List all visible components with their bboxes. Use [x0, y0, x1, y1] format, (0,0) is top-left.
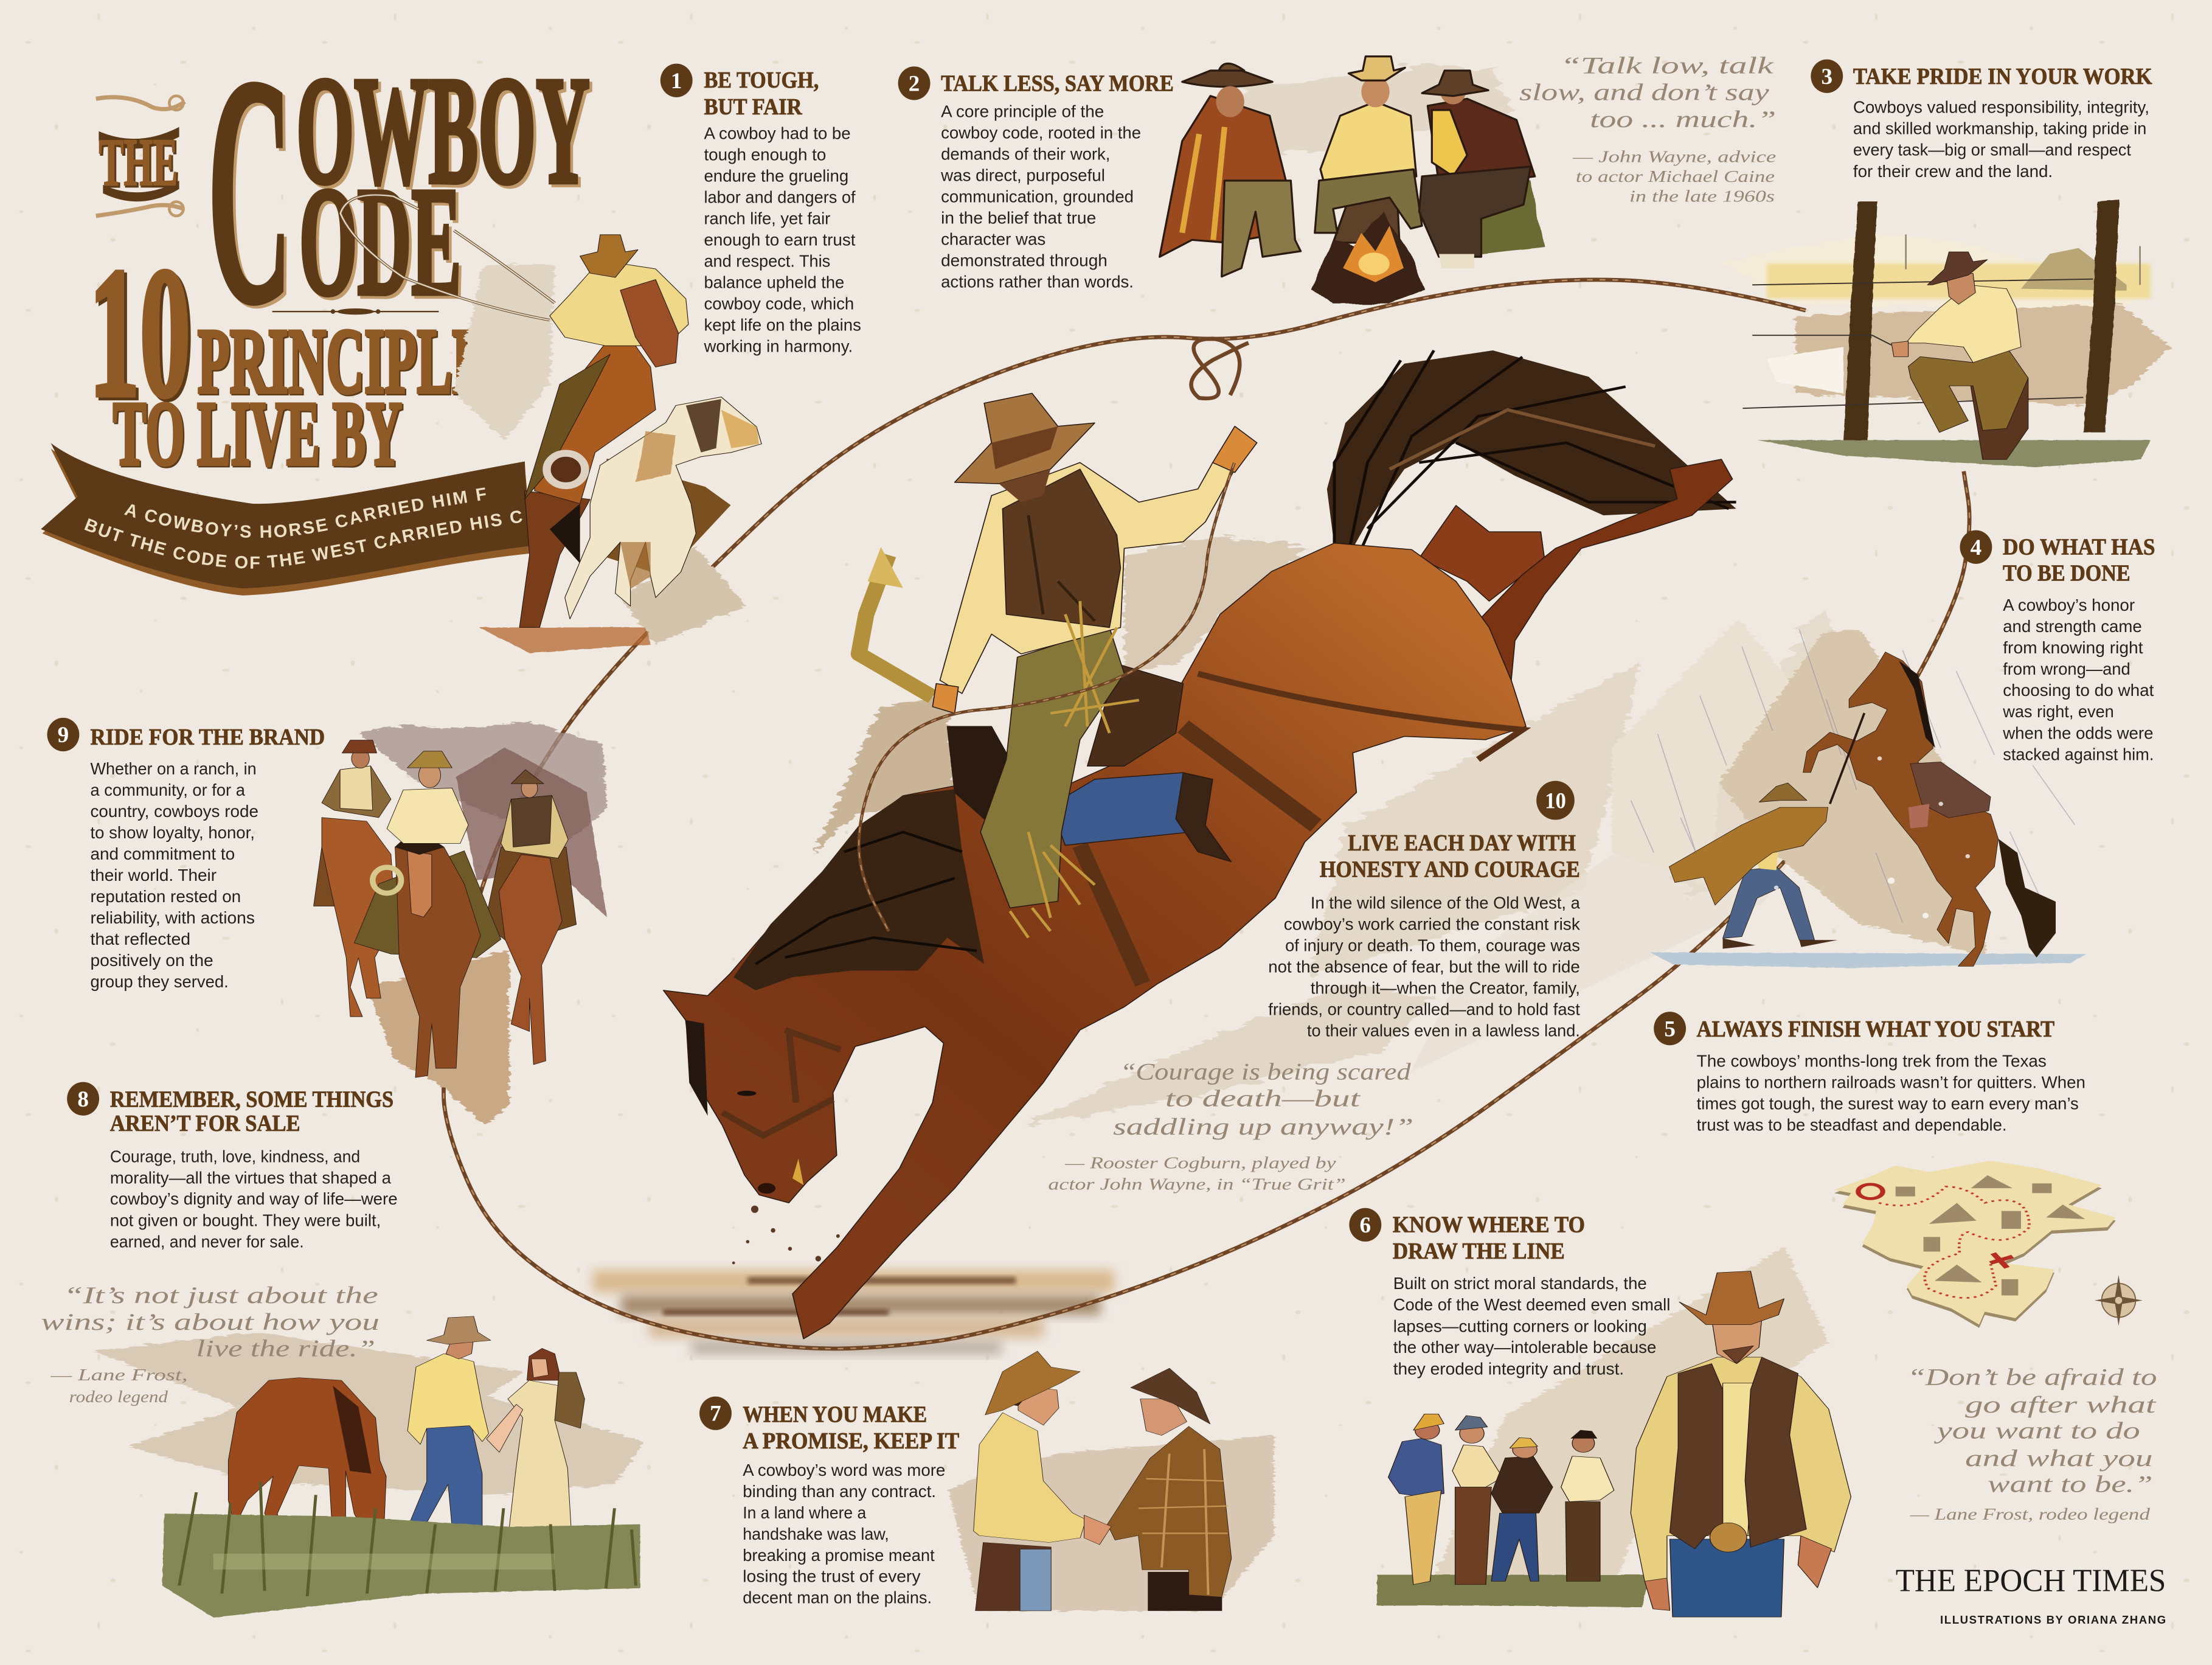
word: THE with ornaments: THE: [99, 125, 178, 200]
principle 5: ALWAYS FINISH WHAT YOU START: [1697, 1017, 2054, 1042]
principle 2: was direct, purposeful: [940, 166, 1105, 185]
principle 2: communication, grounded: [941, 187, 1134, 206]
principle 7: In a land where a: [743, 1503, 867, 1522]
principle 8: AREN’T FOR SALE: [110, 1111, 300, 1136]
subtitle: 10 principles to live by: PRINCIPLES: [199, 311, 518, 414]
principle 7: A cowboy’s word was more: [743, 1461, 945, 1479]
principle 9: country, cowboys rode: [90, 802, 258, 821]
principle 1: and respect. This: [704, 252, 830, 271]
illustration: cowboy family and grazing horse: [94, 1316, 645, 1618]
horse mane: [685, 789, 984, 1116]
principle 2: demonstrated through: [941, 251, 1108, 270]
illustration: cowboy roping a calf: [341, 195, 761, 653]
vest: [1002, 469, 1120, 628]
banner ribbon tail: [606, 459, 731, 590]
word: COWBOY: C: [207, 9, 292, 372]
quote: John Wayne: too ... much.”: [1590, 106, 1776, 133]
principle 6: they eroded integrity and trust.: [1393, 1359, 1624, 1378]
quote: Lane Frost, advice: — Lane Frost, rodeo legend: [1909, 1505, 2150, 1524]
principle 6: the other way—intolerable because: [1393, 1338, 1656, 1357]
background watercolor washes: [814, 63, 1876, 1125]
principle 2: character was: [941, 230, 1045, 249]
principle 2: 2: [909, 72, 920, 97]
principle 1: BUT FAIR: [704, 94, 802, 120]
principle 3: [1811, 60, 2152, 181]
quote: John Wayne: “Talk low, talk: [1560, 52, 1775, 79]
principle 4: stacked against him.: [2003, 745, 2154, 763]
principle 4: from wrong—and: [2003, 659, 2131, 678]
principle 2: A core principle of the: [941, 102, 1104, 121]
principle 6: lapses—cutting corners or looking: [1393, 1316, 1647, 1335]
principle 10: to their values even in a lawless land.: [1307, 1021, 1580, 1040]
principle 10: cowboy’s work carried the constant risk: [1284, 915, 1580, 934]
ground splash under the horse: [592, 1206, 1114, 1355]
word: CODE: [299, 156, 464, 330]
quote: Lane Frost, advice: go after what: [1965, 1391, 2157, 1418]
principle 9: reputation rested on: [90, 887, 241, 906]
principle 9: to show loyalty, honor,: [90, 823, 255, 842]
main cowboy in leather vest: [1631, 1271, 1851, 1617]
grazing horse: [228, 1378, 386, 1540]
horse tail: [1327, 350, 1736, 575]
principle 8: cowboy’s dignity and way of life—were: [110, 1189, 398, 1208]
principle 10: In the wild silence of the Old West, a: [1311, 894, 1580, 912]
principle 9: reliability, with actions: [90, 908, 255, 927]
subtitle: 10 principles to live by: TO LIVE BY: [113, 383, 402, 484]
man in yellow shirt: [399, 1316, 491, 1554]
principle 5: 5: [1664, 1017, 1676, 1041]
principle 1: working in harmony.: [703, 337, 853, 356]
saddle: [948, 726, 1010, 819]
quote: John Wayne: slow, and don’t say: [1519, 79, 1769, 106]
principle 6: Built on strict moral standards, the: [1393, 1274, 1647, 1293]
principle 9: RIDE FOR THE BRAND: [90, 725, 325, 750]
principle 2: TALK LESS, SAY MORE: [941, 71, 1174, 96]
principle 8: 8: [77, 1087, 89, 1112]
jeans and boot: [1050, 773, 1191, 845]
principle 6: KNOW WHERE TO: [1393, 1212, 1585, 1237]
principle 1: ranch life, yet fair: [704, 209, 830, 228]
principle 4: when the odds were: [2002, 723, 2153, 742]
illustration: three riders on horseback: [314, 721, 607, 1125]
lasso rope: [443, 280, 1969, 1349]
principle 1: endure the grueling: [704, 167, 848, 186]
right rider and horse: [485, 770, 577, 1065]
left rider and horse: [314, 740, 395, 1017]
principle 6: [1349, 1208, 1670, 1378]
principle 6: Code of the West deemed even small: [1393, 1295, 1670, 1314]
principle 4: DO WHAT HAS: [2003, 534, 2155, 560]
principle 2: demands of their work,: [941, 145, 1110, 164]
principle 7: handshake was law,: [743, 1524, 889, 1543]
quote: Lane Frost, family: — Lane Frost,: [50, 1366, 188, 1385]
campfire: [1312, 212, 1425, 304]
principle 5: The cowboys’ months-long trek from the Texas: [1697, 1052, 2047, 1071]
principle 10: through it—when the Creator, family,: [1311, 979, 1580, 998]
quote: Lane Frost, family: [41, 1282, 380, 1406]
quote: Lane Frost, family: “It’s not just about the: [63, 1282, 378, 1309]
principle 3: Cowboys valued responsibility, integrity,: [1853, 98, 2149, 117]
shirt: [940, 462, 1235, 693]
principle 4: from knowing right: [2003, 638, 2143, 657]
principle 1: balance upheld the: [704, 273, 844, 292]
horse hind legs: [1419, 459, 1733, 680]
principle 4: and strength came: [2003, 617, 2142, 636]
word: THE with ornaments: [96, 96, 185, 216]
man in yellow shirt on a stump: [1315, 57, 1422, 243]
quote: Lane Frost, advice: and what you: [1965, 1445, 2153, 1472]
principle 8: REMEMBER, SOME THINGS: [110, 1087, 394, 1113]
quote: John Wayne: — John Wayne, advice: [1572, 148, 1776, 167]
main illustration: bucking bronco and rider: [664, 350, 1736, 1339]
principle 4: was right, even: [2002, 702, 2114, 721]
icon: compass rose: [2095, 1275, 2143, 1326]
principle 6: 6: [1360, 1213, 1371, 1238]
principle 3: and skilled workmanship, taking pride in: [1853, 119, 2146, 138]
subtitle: 10 principles to live by: [89, 229, 518, 485]
principle 9: positively on the: [90, 951, 213, 970]
principle 5: plains to northern railroads wasn’t for quitters. When: [1697, 1073, 2085, 1092]
rider braided rope end: [859, 555, 932, 697]
principle 2: in the belief that true: [941, 209, 1096, 228]
quote: John Wayne: [1519, 52, 1776, 206]
quote: Lane Frost, family: live the ride.”: [196, 1335, 375, 1361]
principle 6: DRAW THE LINE: [1393, 1239, 1565, 1264]
text: OWBOY: [296, 45, 590, 215]
quote: Rooster Cogburn: saddling up anyway!”: [1113, 1113, 1413, 1140]
subtitle: 10 principles to live by: TO LIVE BY: [114, 384, 403, 485]
quote: Rooster Cogburn: to death—but: [1165, 1085, 1361, 1111]
quote: Rooster Cogburn: — Rooster Cogburn, played by: [1064, 1154, 1336, 1173]
hands: [1213, 426, 1257, 473]
principle 8: morality—all the virtues that shaped a: [110, 1169, 392, 1187]
chaps: [980, 628, 1124, 908]
quote: Lane Frost, advice: “Don’t be afraid to: [1907, 1363, 2157, 1390]
text: OWBOY: [299, 48, 592, 218]
principle 8: [67, 1082, 398, 1251]
principle 1: enough to earn trust: [704, 231, 856, 249]
principle 1: A cowboy had to be: [704, 123, 851, 142]
harness straps: [1080, 673, 1522, 984]
principle 10: 10: [1545, 789, 1566, 814]
quote: John Wayne: in the late 1960s: [1629, 187, 1775, 206]
illustration: two men shaking hands: [948, 1351, 1274, 1611]
principle 9: 9: [58, 723, 69, 748]
crew of four men: [1389, 1414, 1614, 1585]
principle 1: tough enough to: [704, 145, 826, 164]
word: THE with ornaments: THE: [100, 127, 179, 201]
principle 3: for their crew and the land.: [1853, 162, 2053, 181]
principle 3: TAKE PRIDE IN YOUR WORK: [1853, 64, 2152, 89]
illustration: cowboy with his crew: [1377, 1246, 1851, 1617]
quote: Rooster Cogburn: actor John Wayne, in “True Grit”: [1048, 1175, 1346, 1194]
quote: Lane Frost, advice: you want to do: [1933, 1417, 2140, 1444]
quote: Rooster Cogburn: “Courage is being scared: [1120, 1058, 1411, 1085]
horse bridle and face: [723, 1030, 841, 1194]
principle 9: a community, or for a: [90, 780, 245, 799]
woman and baby: [487, 1348, 584, 1540]
illustration: cowboy and rearing horse in the rain: [1612, 619, 2086, 968]
rider: [859, 394, 1257, 937]
principle 9: Whether on a ranch, in: [90, 759, 257, 778]
principle 5: trust was to be steadfast and dependable.: [1697, 1116, 2006, 1135]
principle 9: [47, 718, 325, 991]
principle 1: cowboy code, which: [704, 294, 854, 313]
fringe: [1010, 601, 1139, 937]
credit: The Epoch Times: THE EPOCH TIMES: [1896, 1562, 2166, 1598]
principle 10: HONESTY AND COURAGE: [1320, 857, 1580, 882]
principle 7: losing the trust of every: [743, 1567, 921, 1586]
illustration: cowboy mending a fence: [1719, 200, 2170, 467]
subtitle: 10 principles to live by: 10: [92, 232, 193, 439]
principle 4: choosing to do what: [2003, 681, 2154, 700]
principle 7: breaking a promise meant: [743, 1546, 935, 1565]
principle 7: binding than any contract.: [743, 1482, 936, 1501]
subtitle: 10 principles to live by: PRINCIPLES: [198, 310, 516, 413]
principle 9: their world. Their: [90, 866, 217, 885]
principle 10: friends, or country called—and to hold fast: [1268, 1000, 1580, 1019]
principle 1: labor and dangers of: [704, 188, 856, 207]
principle 2: actions rather than words.: [941, 273, 1134, 291]
principle 10: not the absence of fear, but the will to ride: [1268, 958, 1580, 976]
word: COWBOY: C: [210, 12, 295, 375]
quote: Rooster Cogburn: [1048, 1058, 1413, 1194]
principle 10: [1268, 781, 1580, 1040]
title: The Cowboy Code: ODE: [302, 159, 464, 330]
principle 8: earned, and never for sale.: [110, 1232, 304, 1251]
quote: Lane Frost, advice: want to be.”: [1988, 1471, 2153, 1498]
man in long coat: [1160, 63, 1301, 277]
principle 3: 3: [1821, 64, 1832, 89]
rope held by rider: [859, 463, 1235, 931]
principle 4: 4: [1971, 535, 1981, 560]
principle 10: LIVE EACH DAY WITH: [1348, 830, 1576, 856]
principle 7: WHEN YOU MAKE: [743, 1402, 927, 1427]
principle 9: and commitment to: [90, 844, 235, 863]
divider ornament: [272, 308, 439, 315]
word: COWBOY: [207, 9, 592, 375]
principle 3: every task—big or small—and respect: [1853, 141, 2131, 159]
principle 7: 7: [710, 1402, 721, 1427]
principle 2: [898, 66, 1174, 291]
principle 7: A PROMISE, KEEP IT: [743, 1428, 959, 1454]
principle 5: [1654, 1012, 2085, 1135]
principle 7: decent man on the plains.: [743, 1588, 932, 1607]
principle 1: 1: [671, 69, 682, 94]
principle 7: [699, 1397, 959, 1607]
credit: The Epoch Times: ILLUSTRATIONS BY ORIANA ZHANG: [1940, 1613, 2166, 1626]
center rider and horse: [355, 751, 501, 1077]
principle 2: cowboy code, rooted in the: [941, 123, 1141, 142]
tall grass: [162, 1482, 640, 1618]
principle 1: [660, 64, 861, 356]
principle 8: not given or bought. They were built,: [110, 1211, 381, 1229]
illustration: treasure trail map: [1834, 1161, 2116, 1328]
principle 5: times got tough, the surest way to earn every man’s: [1697, 1094, 2079, 1113]
principle 9: that reflected: [90, 930, 190, 948]
quote: Lane Frost, family: wins; it’s about how you: [41, 1309, 380, 1335]
horse body, neck, head and front legs: [664, 543, 1526, 1339]
banner ribbon with tagline: [41, 443, 529, 596]
title: The Cowboy Code: [89, 9, 592, 485]
subtitle: 10 principles to live by: 10: [89, 229, 190, 436]
quote: John Wayne: to actor Michael Caine: [1576, 167, 1775, 186]
hat: [955, 394, 1095, 484]
illustration: three men at a campfire: [1160, 57, 1545, 304]
principle 4: TO BE DONE: [2003, 561, 2131, 586]
principle 1: BE TOUGH,: [704, 68, 819, 93]
man in dark vest on hay bale: [1419, 71, 1545, 268]
principle 10: of injury or death. To them, courage was: [1285, 936, 1580, 955]
principle 4: [1960, 530, 2155, 763]
principle 4: A cowboy’s honor: [2003, 596, 2135, 614]
quote: Lane Frost, family: rodeo legend: [69, 1388, 168, 1406]
quote: Lane Frost, advice: [1907, 1363, 2157, 1524]
credit: The Epoch Times: [1896, 1562, 2166, 1626]
principle 9: group they served.: [90, 972, 229, 991]
title: The Cowboy Code: ODE: [299, 156, 461, 327]
principle 1: kept life on the plains: [704, 316, 861, 335]
principle 8: Courage, truth, love, kindness, and: [110, 1147, 360, 1166]
